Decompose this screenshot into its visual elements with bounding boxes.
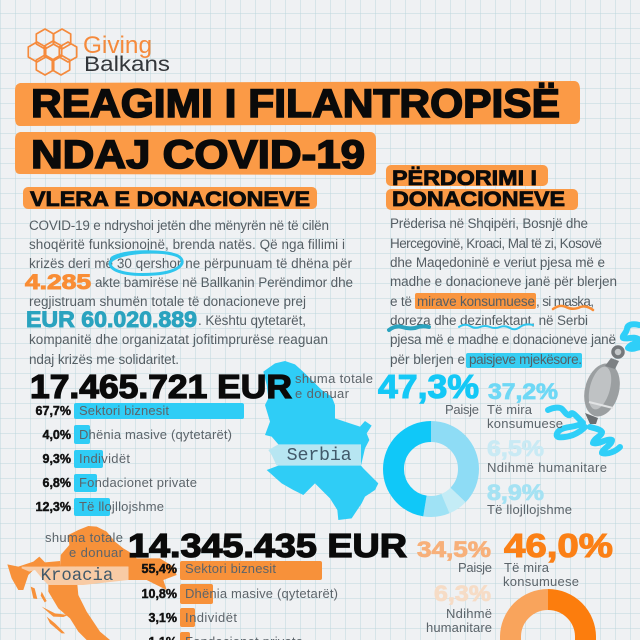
stats: Croatia usage: 6,3% xyxy=(434,581,491,606)
text block: usage xyxy=(389,216,617,368)
map label: Serbia: Serbia xyxy=(287,445,352,466)
stats: Serbia usage: konsumuese xyxy=(487,416,563,431)
logo wordmark: Giving: Giving xyxy=(83,32,152,59)
map label: Croatia: Kroacia xyxy=(41,567,113,586)
number: EUR 60.020.889: EUR 60.020.889 xyxy=(26,307,197,332)
title xyxy=(15,81,580,177)
title line 2: NDAJ COVID-19 xyxy=(31,133,365,177)
stats: Serbia usage: 6,5% xyxy=(487,436,544,461)
bar chart: Serbia donors: 9,3% xyxy=(42,452,71,466)
stats: Serbia usage: Paisje xyxy=(445,402,479,417)
text block: usage: Prëderisa në Shqipëri, Bosnjë dhe xyxy=(390,216,588,231)
bar chart: Serbia donors: 4,0% xyxy=(42,428,71,442)
stats: Serbia usage: 8,9% xyxy=(487,480,544,505)
icon: hexagon flower xyxy=(28,29,77,75)
bar chart: Serbia donors: 12,3% xyxy=(36,500,71,514)
callout: circle around 30 qershor xyxy=(110,252,182,275)
text block: intro xyxy=(25,218,353,367)
text block: usage: për blerjen e xyxy=(390,352,465,367)
title line 1: REAGIMI I FILANTROPISË xyxy=(31,82,560,126)
stats: Croatia usage: konsumuese xyxy=(503,574,579,589)
text block: usage: madhe e donacioneve janë për blerjen xyxy=(390,274,617,289)
text block: intro: COVID-19 e ndryshoi jetën dhe mënyrën në të cilën xyxy=(29,218,329,233)
donut chart: Serbia xyxy=(394,432,468,506)
heading: përdorimi i donacioneve: PËRDORIMI I xyxy=(392,167,537,190)
text block: usage: dhe Maqedoninë e veriut pjesa më e xyxy=(390,255,605,270)
bar chart: Croatia donors: 55,4% xyxy=(142,562,177,576)
text block: usage: doreza dhe dezinfektant, në Serbi xyxy=(390,313,588,328)
total: Serbia 17.465.721 EUR: 17.465.721 EUR xyxy=(30,368,292,405)
logo wordmark: Balkans: Balkans xyxy=(84,53,170,76)
number: 4.285 acts: 4.285 xyxy=(25,271,91,294)
tube squiggles xyxy=(548,324,640,454)
stats: Croatia usage xyxy=(417,527,613,635)
squiggle: dezinfektant xyxy=(459,324,533,329)
heading: përdorimi i donacioneve xyxy=(386,165,578,211)
bar chart: Serbia donors xyxy=(36,403,244,516)
text block: usage: pjesa më e madhe e donacioneve janë xyxy=(390,332,616,347)
donut chart: Croatia xyxy=(510,600,586,640)
text block: intro: regjistruam shumën totale të donacioneve prej xyxy=(29,294,306,309)
caption: shuma totale e donuar: shuma totale xyxy=(45,530,123,545)
text block: intro: shoqëritë funksionojnë, brenda natës. Që nga fillimi i xyxy=(29,237,345,252)
stats: Serbia usage: 37,2% xyxy=(488,379,558,404)
heading: përdorimi i donacioneve: DONACIONEVE xyxy=(392,188,565,211)
bar chart: Croatia donors xyxy=(142,561,338,640)
stats: Serbia usage: Ndihmë humanitare xyxy=(487,460,607,475)
bar chart: Croatia donors: Dhënia masive (qytetarët) xyxy=(185,586,338,601)
text block: intro: krizës deri më 30 qershor ne përpunuam të dhëna për xyxy=(29,256,352,271)
squiggle: maska xyxy=(553,306,593,310)
text block: usage: paisjeve mjekësore. xyxy=(469,352,582,367)
bar chart: Serbia donors: Fondacionet private xyxy=(79,475,197,490)
title band 2 xyxy=(15,132,376,175)
bag xyxy=(579,360,625,420)
caption: shuma totale e donuar: e donuar xyxy=(69,545,124,560)
caption: shuma totale e donuar xyxy=(45,530,124,560)
text block: intro: kompanitë dhe organizatat jofitimprurëse reaguan xyxy=(29,332,328,347)
bar chart: Serbia donors: 6,8% xyxy=(42,476,71,490)
bar chart: Serbia donors: Individët xyxy=(79,451,130,466)
caption: shuma totale e donuar xyxy=(295,371,373,401)
stats: Croatia usage: humanitare xyxy=(426,620,492,635)
title band 1 xyxy=(15,81,580,126)
stats: Serbia usage: Të llojllojshme xyxy=(487,502,572,517)
logo: Giving Balkans xyxy=(28,29,170,76)
highlight: mirave konsumuese xyxy=(415,293,536,309)
bar chart: Serbia donors: Dhënia masive (qytetarët) xyxy=(79,427,232,442)
bar chart: Croatia donors: Individët xyxy=(185,610,237,625)
caption: shuma totale e donuar: shuma totale xyxy=(295,371,373,386)
text block: usage: Hercegovinë, Kroaci, Mal të zi, Kosovë xyxy=(390,236,602,251)
map: Serbia xyxy=(263,361,378,520)
stats: Serbia usage xyxy=(378,368,607,517)
bar chart: Serbia donors: Sektori biznesit xyxy=(79,403,169,418)
illustration: resuscitator bag with blue tube xyxy=(548,324,640,454)
bar chart: Croatia donors: Sektori biznesit xyxy=(185,561,276,576)
text block: usage: mirave konsumuese xyxy=(417,294,535,309)
map label band: Serbia xyxy=(268,444,361,466)
map label band: Croatia xyxy=(22,567,128,585)
text block: intro: akte bamirëse në Ballkanin Perëndimor dhe xyxy=(95,275,353,290)
heading: vlera e donacioneve: VLERA E DONACIONEVE xyxy=(30,188,310,211)
bar chart: Serbia donors: 67,7% xyxy=(36,404,71,418)
stats: Croatia usage: 46,0% xyxy=(504,527,613,564)
map: Croatia xyxy=(7,526,177,640)
bar chart: Croatia donors: 3,1% xyxy=(148,611,177,625)
text block: usage: , si maska, xyxy=(536,294,594,309)
text block: intro: ndaj krizës me solidaritet. xyxy=(29,352,179,367)
highlight: paisjeve mjekësore xyxy=(466,353,582,368)
total: Croatia 14.345.435 EUR: 14.345.435 EUR xyxy=(128,527,407,564)
text block: intro: . Kështu qytetarët, xyxy=(198,313,306,328)
text block: usage: e të xyxy=(390,294,412,309)
total: Croatia 14.345.435 EUR xyxy=(45,527,407,564)
caption: shuma totale e donuar: e donuar xyxy=(295,386,350,401)
squiggle: doreza xyxy=(389,326,429,330)
bar chart: Serbia donors: Të llojllojshme xyxy=(79,499,164,514)
stats: Croatia usage: Ndihmë xyxy=(446,606,492,621)
stats: Croatia usage: 34,5% xyxy=(417,537,491,562)
bar chart: Croatia donors: 10,8% xyxy=(142,587,177,601)
stats: Croatia usage: Paisje xyxy=(458,560,492,575)
stats: Serbia usage: Të mira xyxy=(487,402,533,417)
stats: Croatia usage: Të mira xyxy=(504,560,550,575)
stats: Serbia usage: 47,3% xyxy=(378,368,479,405)
